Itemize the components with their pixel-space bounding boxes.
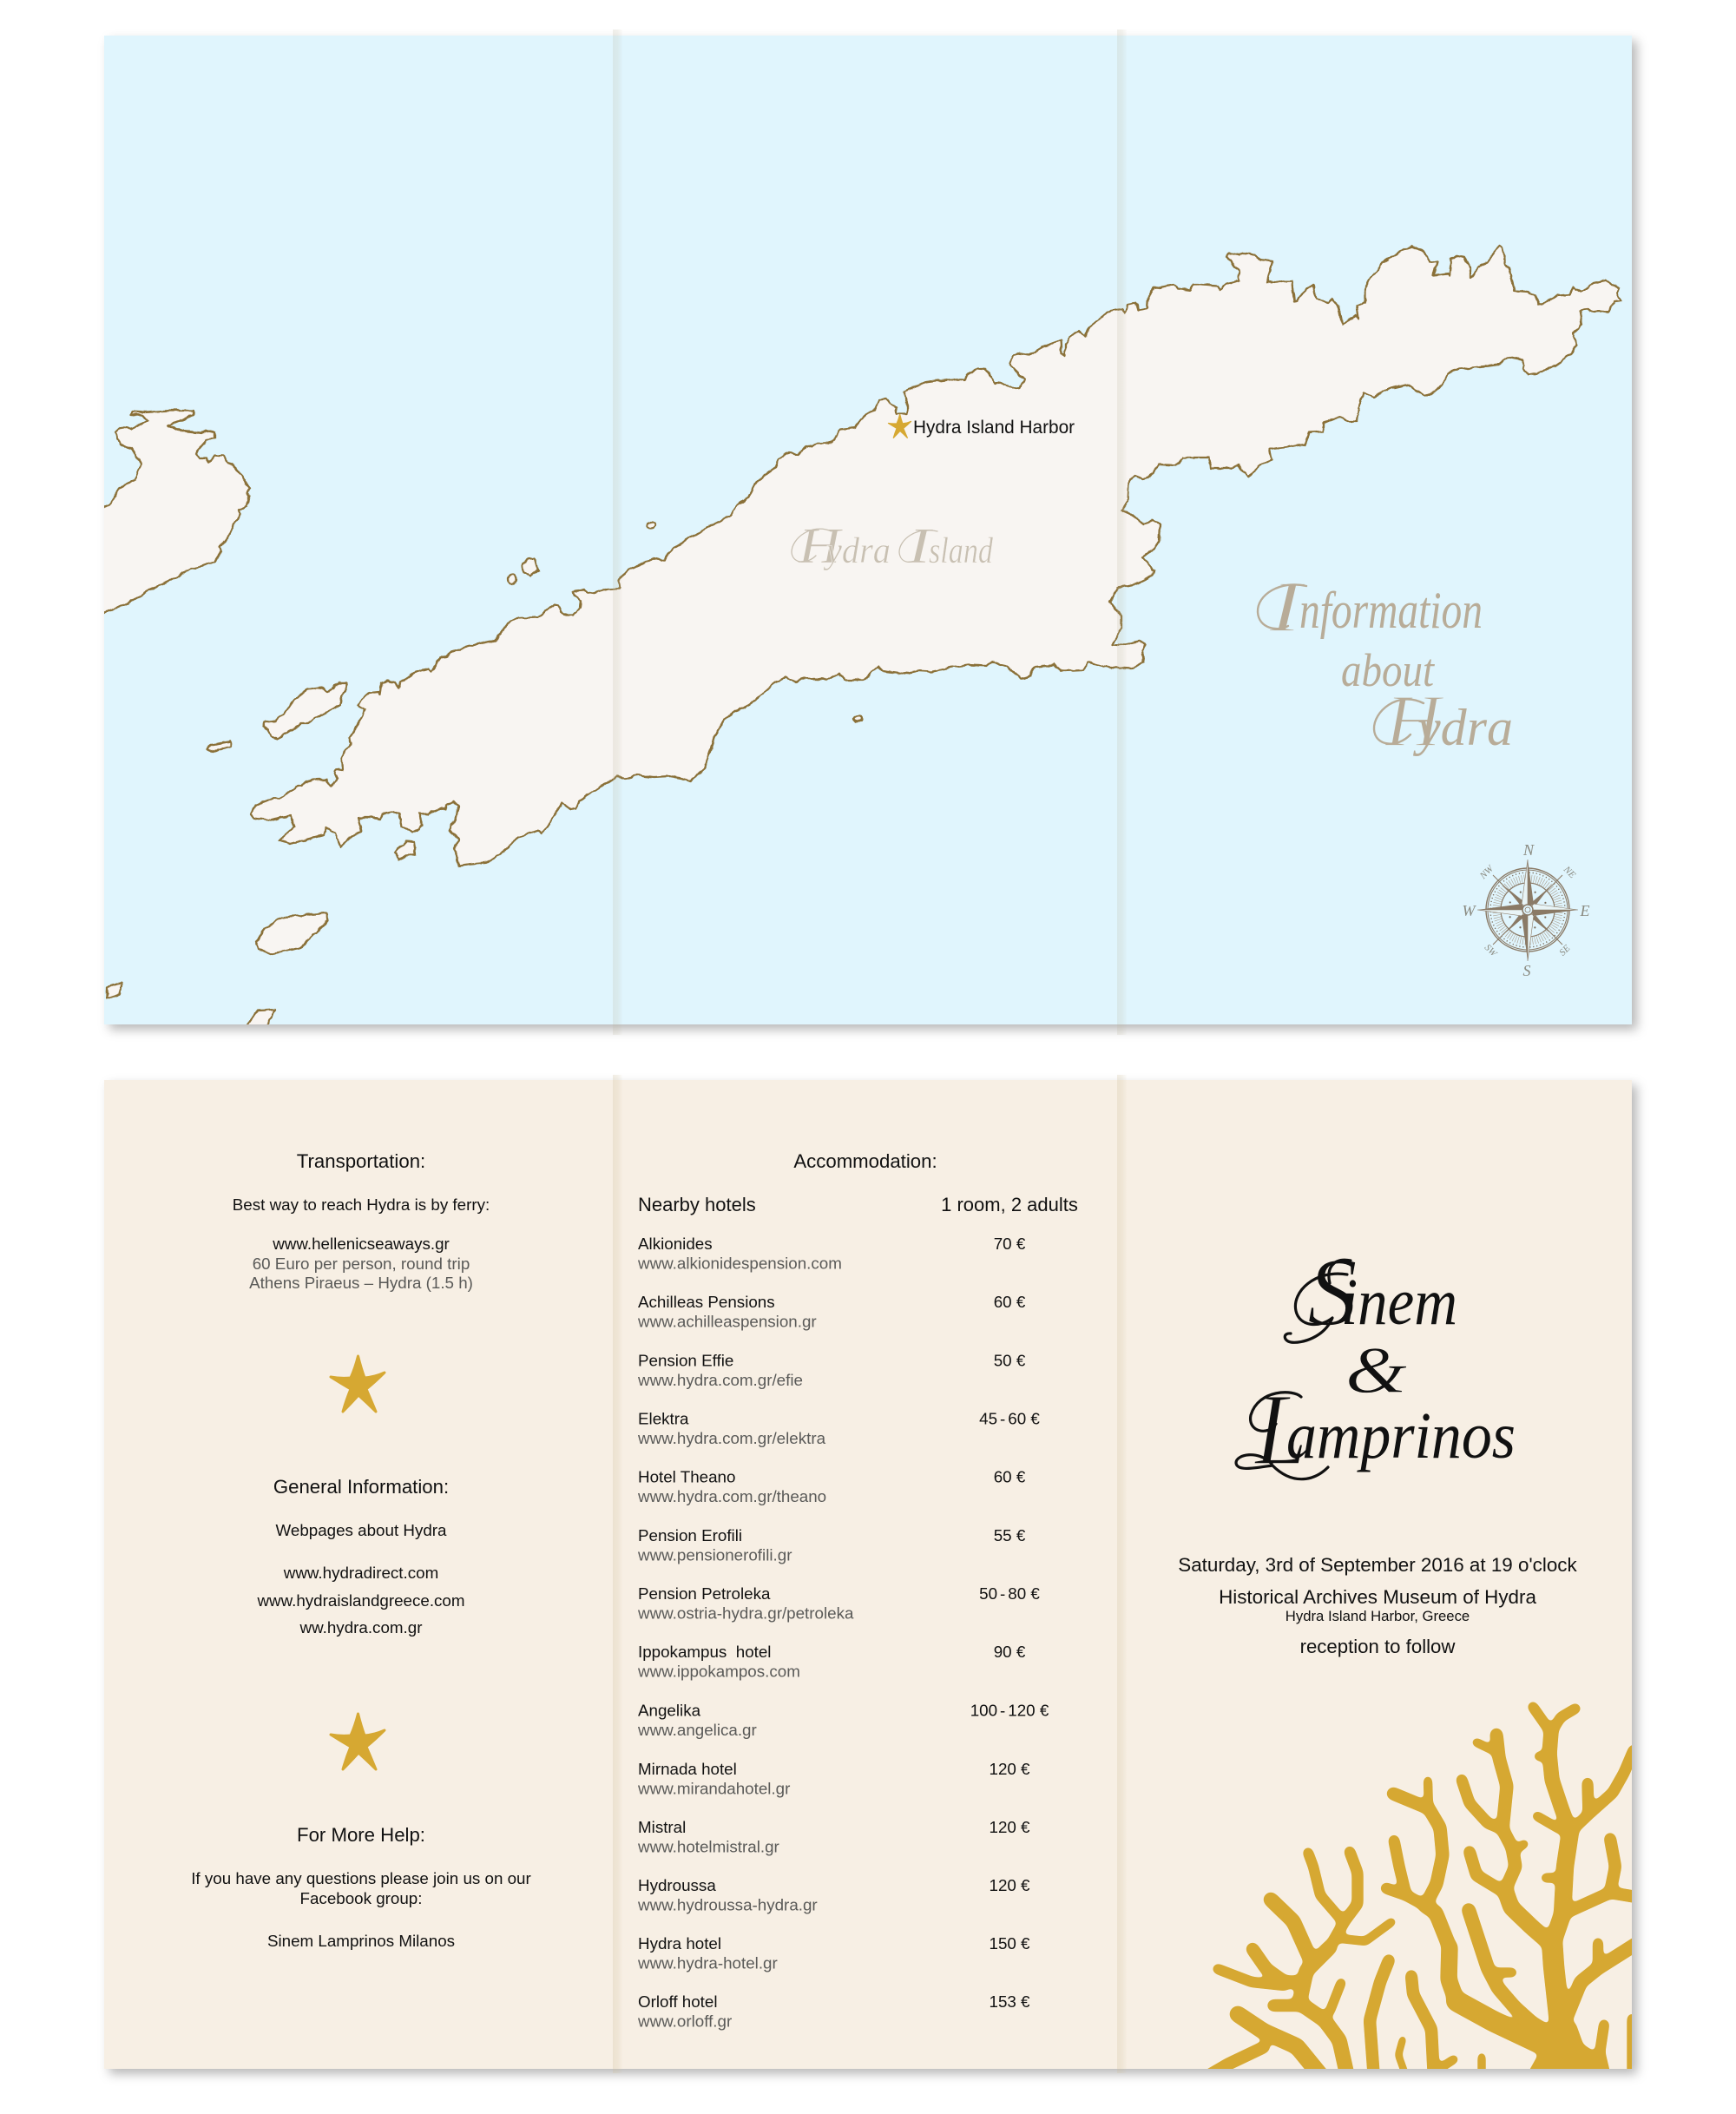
hotel: Mistral: 120 € xyxy=(990,1818,1030,1836)
heading: Information about Hydra: I xyxy=(1268,567,1306,648)
hotel: Pension Erofili xyxy=(637,1526,1026,1564)
hotel: Orloff hotel xyxy=(637,1992,1030,2030)
text: webpages: www.hydraislandgreece.com xyxy=(256,1591,465,1610)
hotel: Pension Erofili: Pension Erofili xyxy=(638,1526,742,1544)
hotel: Pension Erofili: www.pensionerofili.gr xyxy=(637,1545,792,1564)
hotel: Alkionides: Alkionides xyxy=(638,1235,713,1253)
hotel: Pension Petroleka: Pension Petroleka xyxy=(638,1584,771,1603)
fold: right xyxy=(1117,30,1127,1035)
column head: Nearby hotels: Nearby hotels xyxy=(638,1194,756,1215)
hotel: Mirnada hotel: 120 € xyxy=(990,1760,1030,1778)
hotel: Hydroussa: Hydroussa xyxy=(638,1876,716,1894)
fold: right xyxy=(1117,1075,1127,2073)
text: webpages: www.hydradirect.com xyxy=(283,1564,438,1582)
title: Sinem & Lamprinos: & xyxy=(1345,1334,1407,1407)
hotel: Hydra hotel: 150 € xyxy=(990,1934,1030,1953)
hotel: Angelika: Angelika xyxy=(638,1702,701,1719)
label: Hydra Island Harbor: Hydra Island Harbor xyxy=(913,418,1075,438)
text: ferry details: Athens Piraeus – Hydra (1.5 h) xyxy=(249,1274,473,1292)
hotel: Hotel Theano: 60 € xyxy=(994,1467,1026,1486)
hotel: Mirnada hotel: www.mirandahotel.gr xyxy=(637,1780,790,1797)
hotel: Pension Effie: www.hydra.com.gr/efie xyxy=(637,1371,803,1389)
hotel: Alkionides: www.alkionidespension.com xyxy=(637,1254,842,1273)
hotel: Hotel Theano: Hotel Theano xyxy=(638,1467,735,1486)
title: Sinem & Lamprinos xyxy=(1236,1239,1516,1486)
text: ferry note: Best way to reach Hydra is by ferry: xyxy=(233,1195,490,1214)
paper background xyxy=(104,1080,1632,2069)
heading: General Information: General Information: xyxy=(273,1476,449,1498)
text: facebook note: Facebook group: xyxy=(300,1889,422,1907)
island: tiny rock north xyxy=(508,574,516,584)
island: bottom edge islet xyxy=(244,1010,276,1030)
heading: For More Help: For More Help: xyxy=(297,1824,425,1846)
hotel: Alkionides: 70 € xyxy=(994,1235,1026,1253)
sea background xyxy=(104,36,1632,1024)
coral: right branches xyxy=(1462,1707,1641,2079)
hotel: Achilleas Pensions: 60 € xyxy=(994,1293,1026,1311)
hotel: Pension Petroleka xyxy=(637,1584,1040,1622)
island: southern islet xyxy=(256,913,328,954)
hotel: Mistral xyxy=(637,1818,1030,1856)
icon: compass rose: S xyxy=(1522,962,1531,979)
fold: left xyxy=(613,30,622,1035)
map landmass shapes xyxy=(91,246,1621,1030)
hotel: Elektra: www.hydra.com.gr/elektra xyxy=(637,1429,826,1447)
hotel: Hotel Theano: www.hydra.com.gr/theano xyxy=(637,1487,826,1505)
icon: harbor starfish xyxy=(888,414,911,438)
hotel: Ippokampus hotel: Ippokampus hotel xyxy=(638,1643,771,1661)
label: Hydra Island: H xyxy=(798,517,844,574)
text: event details xyxy=(1178,1554,1578,1657)
coral: left branches xyxy=(1207,1852,1482,2079)
hotel: Orloff hotel: Orloff hotel xyxy=(638,1992,718,2011)
text: event details: reception to follow xyxy=(1300,1636,1456,1657)
hotel: Pension Petroleka: www.ostria-hydra.gr/petroleka xyxy=(637,1604,854,1622)
hotel: Pension Petroleka: 50-80 € xyxy=(979,1584,1040,1603)
hotel: Orloff hotel: www.orloff.gr xyxy=(637,2012,732,2030)
fold: left xyxy=(613,1075,622,2073)
label: Hydra Island: I xyxy=(907,517,934,574)
landmass: western headland xyxy=(91,411,250,620)
illustration: coral xyxy=(1207,1707,1641,2079)
map landmasses xyxy=(91,246,1621,1030)
hotel: Angelika: 100-120 € xyxy=(970,1702,1049,1719)
icon: compass rose: N xyxy=(1522,841,1535,859)
icon: compass rose: NW xyxy=(1477,863,1496,882)
hotel: Mirnada hotel: Mirnada hotel xyxy=(638,1760,737,1778)
hotel: Ippokampus hotel: www.ippokampos.com xyxy=(637,1662,800,1681)
title: Sinem & Lamprinos: S xyxy=(1307,1239,1358,1347)
title: Sinem & Lamprinos: inem xyxy=(1341,1266,1457,1339)
text: facebook note: Sinem Lamprinos Milanos xyxy=(267,1932,455,1950)
heading: Information about Hydra: ydra xyxy=(1412,699,1513,756)
hotel: Pension Erofili: 55 € xyxy=(994,1526,1026,1544)
icon: compass rose: SW xyxy=(1483,942,1499,959)
coral: middle branches xyxy=(1386,1781,1561,2053)
hotel: Hydra hotel xyxy=(637,1934,1030,1972)
island: tiny islet near north coast xyxy=(647,523,655,528)
text: webpages: ww.hydra.com.gr xyxy=(299,1618,422,1637)
label: Hydra Island: ydra xyxy=(823,531,891,571)
hotel: Mirnada hotel xyxy=(637,1760,1030,1797)
section: Accommodation xyxy=(637,1150,1078,2030)
text: facebook note xyxy=(191,1869,531,1950)
icon: starfish 1 xyxy=(331,1356,385,1412)
heading: Accommodation: Accommodation: xyxy=(793,1150,937,1172)
hotel: Ippokampus hotel xyxy=(637,1643,1026,1681)
icon: compass rose: W xyxy=(1462,902,1477,919)
hotel: Angelika xyxy=(637,1702,1049,1739)
island: corner islet xyxy=(107,983,122,998)
hotel: Achilleas Pensions: Achilleas Pensions xyxy=(638,1293,775,1311)
section: For More Help xyxy=(191,1824,531,1950)
icon: starfish 2 xyxy=(331,1714,385,1769)
heading: Information about Hydra: about xyxy=(1341,644,1436,696)
hotel: Pension Effie: Pension Effie xyxy=(638,1351,733,1370)
hotel: Achilleas Pensions: www.achilleaspension.gr xyxy=(637,1313,817,1330)
text: webpages: Webpages about Hydra xyxy=(276,1521,447,1539)
text: ferry details: www.hellenicseaways.gr xyxy=(272,1235,450,1253)
text: webpages xyxy=(256,1521,465,1637)
panel: invitation back side xyxy=(104,1075,1641,2079)
island: south rock xyxy=(395,840,416,859)
coral: base xyxy=(1529,2016,1609,2069)
hotel: Pension Effie xyxy=(637,1351,1026,1389)
section: General Information xyxy=(256,1476,465,1637)
text: facebook note: If you have any questions please join us on our xyxy=(191,1869,531,1887)
hotel: Achilleas Pensions xyxy=(637,1293,1026,1330)
text: event details: Saturday, 3rd of September 2016 at 19 o'clock xyxy=(1178,1554,1578,1576)
title: Sinem & Lamprinos: amprinos xyxy=(1286,1399,1516,1472)
hotel: Hydroussa: www.hydroussa-hydra.gr xyxy=(637,1896,818,1913)
hotel: Hotel Theano xyxy=(637,1467,1026,1505)
hotel: Angelika: www.angelica.gr xyxy=(637,1721,757,1739)
heading: Information about Hydra: H xyxy=(1384,679,1444,762)
label: Hydra Island xyxy=(792,517,994,574)
island: small rock north xyxy=(523,558,538,576)
text: event details: Hydra Island Harbor, Greece xyxy=(1286,1608,1470,1624)
hotel: Pension Effie: 50 € xyxy=(994,1351,1026,1370)
hotel: Orloff hotel: 153 € xyxy=(990,1992,1030,2011)
island: Hydra main island xyxy=(252,246,1621,866)
text: event details: Historical Archives Museum of Hydra xyxy=(1219,1586,1536,1608)
panel: map of Hydra xyxy=(91,30,1632,1035)
text: ferry details: 60 Euro per person, round trip xyxy=(253,1255,470,1273)
title: Sinem & Lamprinos: L xyxy=(1253,1373,1307,1486)
hotel: Elektra: 45-60 € xyxy=(979,1410,1040,1427)
heading: Information about Hydra xyxy=(1258,567,1513,762)
icon: compass rose: SE xyxy=(1557,943,1573,958)
heading: Transportation: Transportation: xyxy=(297,1150,425,1172)
text: ferry details xyxy=(249,1235,473,1292)
icon: compass rose: NE xyxy=(1561,864,1578,880)
island: tiny islet south xyxy=(853,716,862,721)
hotel: Ippokampus hotel: 90 € xyxy=(994,1643,1026,1661)
icon: compass rose: E xyxy=(1580,902,1590,919)
label: Hydra Island: sland xyxy=(929,531,994,571)
section: Transportation xyxy=(233,1150,490,1292)
hotel: Alkionides xyxy=(637,1235,1026,1273)
island: west islet xyxy=(207,741,231,752)
hotel: Hydroussa xyxy=(637,1876,1030,1913)
coral shapes xyxy=(1207,1707,1641,2079)
icon: compass rose xyxy=(1462,841,1590,979)
heading: Information about Hydra: nformation xyxy=(1299,582,1483,639)
hotel: Elektra: Elektra xyxy=(638,1410,689,1427)
island: north-west islet xyxy=(263,683,347,739)
column head: price: 1 room, 2 adults xyxy=(941,1194,1078,1215)
hotel: Hydroussa: 120 € xyxy=(990,1876,1030,1894)
hotel: Mistral: www.hotelmistral.gr xyxy=(637,1837,779,1856)
hotel: Hydra hotel: www.hydra-hotel.gr xyxy=(637,1953,778,1972)
hotel: Mistral: Mistral xyxy=(638,1818,686,1836)
hotel: Elektra xyxy=(637,1410,1040,1447)
hotel: Hydra hotel: Hydra hotel xyxy=(638,1934,721,1953)
